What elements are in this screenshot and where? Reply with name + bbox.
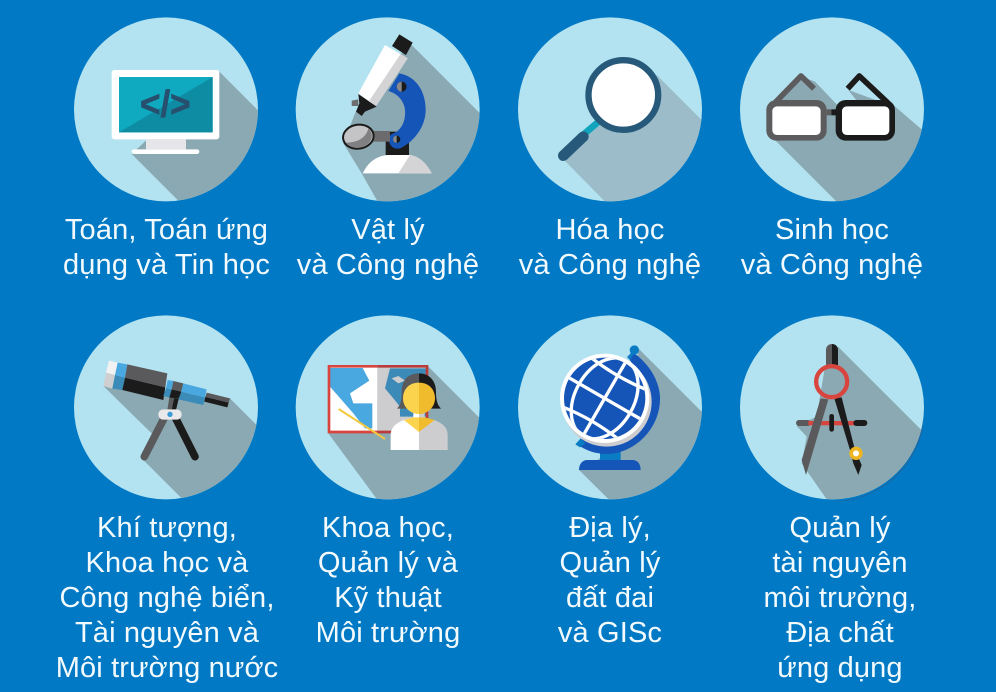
icon: microscope [296,17,480,202]
icon: drawing compass [740,315,924,502]
label: environmental science: Môi trường [316,617,460,649]
icon: globe [518,315,702,500]
label: meteorology: Tài nguyên và [75,617,260,649]
label: environmental science: Khoa học, [322,512,454,544]
label: physics: và Công nghệ [297,249,479,281]
label: biology: và Công nghệ [741,249,923,281]
label: math: dụng và Tin học [63,249,270,281]
label: resources and geology: môi trường, [764,582,916,614]
panel: geography [518,315,702,642]
icon: teacher and map board [296,315,480,500]
panel: meteorology and marine [56,315,293,684]
icon: telescope [74,315,258,500]
panel: biology [740,17,924,280]
label: environmental science: Quản lý và [318,547,459,579]
label: meteorology: Khí tượng, [97,512,237,544]
label: geography: và GISc [558,617,662,649]
label: resources and geology: Địa chất [786,617,894,649]
label: chemistry: Hóa học [555,214,665,246]
label: meteorology: Môi trường nước [56,652,278,684]
label: meteorology: Công nghệ biển, [59,582,275,614]
panel: resources and geology [740,315,924,683]
label: geography: Quản lý [560,547,661,579]
panel: chemistry [518,17,702,280]
label: environmental science: Kỹ thuật [334,582,442,614]
label: meteorology: Khoa học và [86,547,249,579]
label: resources and geology: tài nguyên [772,547,908,579]
panel: environmental science [296,315,480,648]
label: geography: đất đai [566,582,654,614]
label: math: Toán, Toán ứng [65,214,268,246]
icon: computer monitor: </> [140,84,191,125]
label: geography: Địa lý, [569,512,651,544]
label: resources and geology: Quản lý [790,512,891,544]
label: biology: Sinh học [775,214,889,246]
icon: computer monitor [74,17,258,202]
icon: glasses [740,17,924,202]
panel: physics [296,17,480,280]
label: physics: Vật lý [351,214,425,246]
label: resources and geology: ứng dụng [777,652,903,684]
icon: magnifying glass [518,17,702,202]
panel: math and informatics [64,17,270,280]
label: chemistry: và Công nghệ [519,249,701,281]
